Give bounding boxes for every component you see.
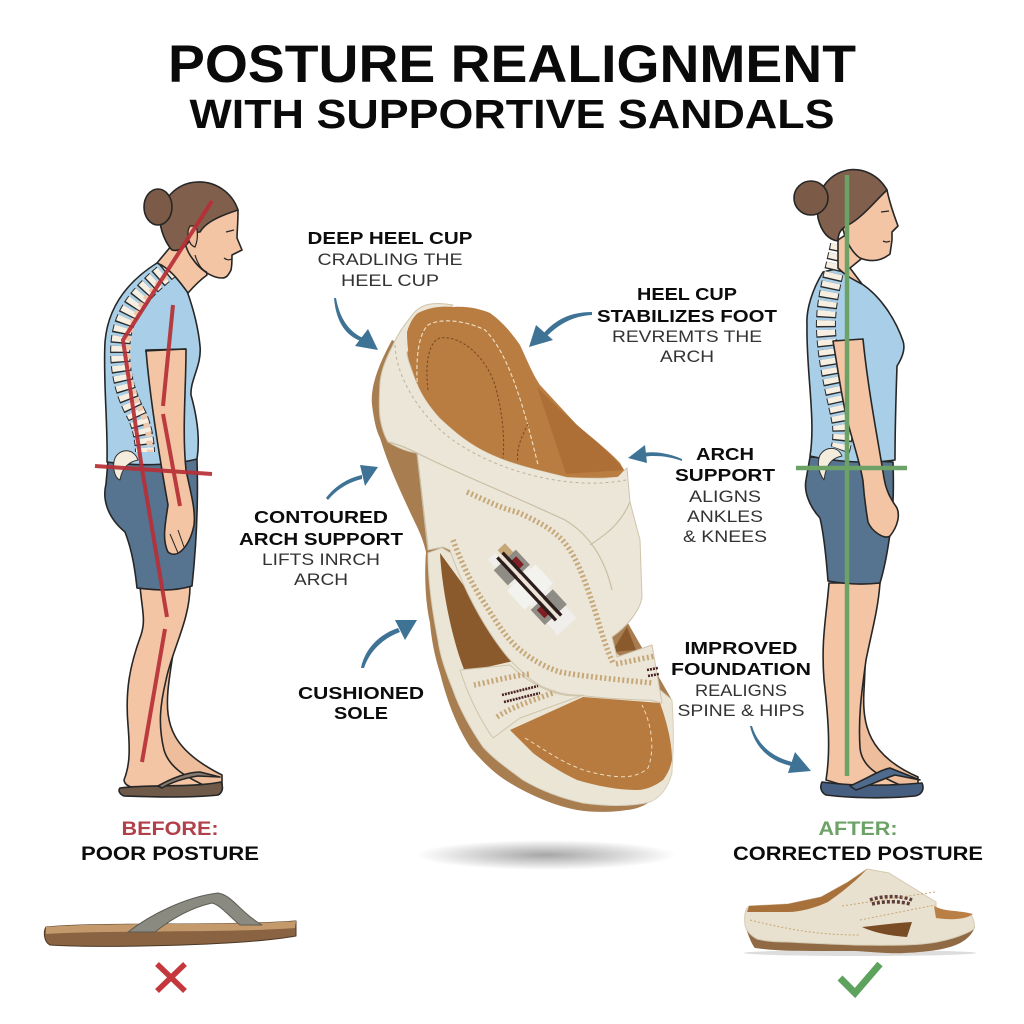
icon: red cross [157, 964, 185, 991]
head [841, 185, 898, 261]
zigzag stitching [453, 492, 655, 717]
green alignment lines [796, 175, 907, 776]
arrow: heel stabilizes [529, 312, 592, 347]
callout: deep heel cup: CRADLING THE [318, 250, 462, 269]
callout: cushioned sole: SOLE [334, 703, 388, 723]
spine [114, 262, 178, 480]
callout: arch support: ALIGNS [689, 487, 761, 506]
arrow: contoured arch [326, 465, 378, 500]
callout: contoured arch support: LIFTS INRCH [262, 550, 380, 569]
footbed stitching [417, 321, 538, 465]
neck [157, 240, 207, 293]
leg near [124, 586, 205, 788]
label: before: POOR POSTURE [81, 844, 259, 865]
callout: deep heel cup: HEEL CUP [341, 271, 439, 290]
hair [817, 170, 887, 241]
label: after: AFTER: [818, 819, 898, 840]
icon: green check [840, 964, 880, 993]
dark interior [440, 553, 518, 672]
side wedge [428, 548, 673, 806]
callout: heel cup stabilizes foot: ARCH [660, 347, 714, 366]
flip flop [821, 782, 923, 798]
leg far [150, 590, 222, 785]
label: after [733, 819, 983, 865]
callout: arch support: ANKLES [687, 507, 763, 526]
leg far [850, 590, 918, 785]
callout: contoured arch support [239, 507, 403, 589]
figure: corrected posture [794, 170, 923, 798]
callout: improved foundation: FOUNDATION [671, 659, 811, 679]
arm [146, 349, 194, 554]
hair [160, 182, 238, 250]
arrow: cushioned sole [361, 620, 417, 668]
label: after: CORRECTED POSTURE [733, 844, 983, 865]
callout: improved foundation: SPINE & HIPS [678, 701, 804, 720]
arrow: improved foundation [750, 726, 811, 773]
leg near [823, 583, 902, 786]
label: before [81, 819, 259, 865]
front footbed [510, 697, 672, 790]
arrow: deep heel cup [334, 298, 378, 350]
callout: cushioned sole: CUSHIONED [298, 683, 424, 703]
shirt [807, 268, 904, 462]
ear [188, 226, 197, 247]
neck [838, 225, 866, 284]
callout: arch support: ARCH [696, 444, 754, 464]
embroidery motif [482, 538, 581, 640]
callout: improved foundation: REALIGNS [695, 681, 787, 700]
flip flop [119, 782, 222, 797]
callout: heel cup stabilizes foot [597, 284, 777, 366]
arm [833, 339, 898, 537]
callout: heel cup stabilizes foot: REVREMTS THE [612, 327, 762, 346]
ground shadow [416, 840, 676, 870]
cream upper collar and vamp [379, 303, 662, 703]
spine [818, 245, 842, 480]
callout: contoured arch support: CONTOURED [254, 507, 388, 527]
callout: deep heel cup [308, 228, 473, 290]
heel footbed [407, 307, 624, 478]
shirt [105, 263, 200, 465]
outsole [372, 340, 672, 812]
callout: arch support: SUPPORT [675, 465, 775, 485]
callout: arch support [675, 444, 775, 546]
callout: deep heel cup: DEEP HEEL CUP [308, 228, 473, 248]
small embroidery [502, 668, 659, 702]
callout: improved foundation [671, 638, 811, 720]
head [183, 189, 242, 278]
title: POSTURE REALIGNMENT [168, 35, 856, 94]
callout: contoured arch support: ARCH [294, 570, 348, 589]
face details [195, 230, 234, 272]
arrow: arch support [628, 445, 682, 463]
icon: corrected sandal [744, 869, 976, 956]
callout: heel cup stabilizes foot: HEEL CUP [637, 284, 737, 304]
toe strap [460, 665, 583, 738]
strap seams [388, 442, 630, 590]
red alignment lines [95, 201, 212, 762]
callout: cushioned sole [298, 683, 424, 723]
icon: flip flop [44, 893, 296, 946]
figure: poor posture [105, 182, 242, 797]
rim stitching [395, 345, 626, 483]
shorts [806, 457, 893, 584]
callout: improved foundation: IMPROVED [684, 638, 798, 658]
central sandal [372, 303, 673, 812]
callout: arch support: & KNEES [683, 527, 767, 546]
callout: contoured arch support: ARCH SUPPORT [239, 529, 403, 549]
label: before: BEFORE: [122, 819, 218, 840]
callout: heel cup stabilizes foot: STABILIZES FOOT [597, 306, 777, 326]
front footbed stitching [525, 705, 652, 777]
title: WITH SUPPORTIVE SANDALS [190, 91, 834, 137]
shorts [105, 459, 197, 590]
title [168, 35, 856, 137]
